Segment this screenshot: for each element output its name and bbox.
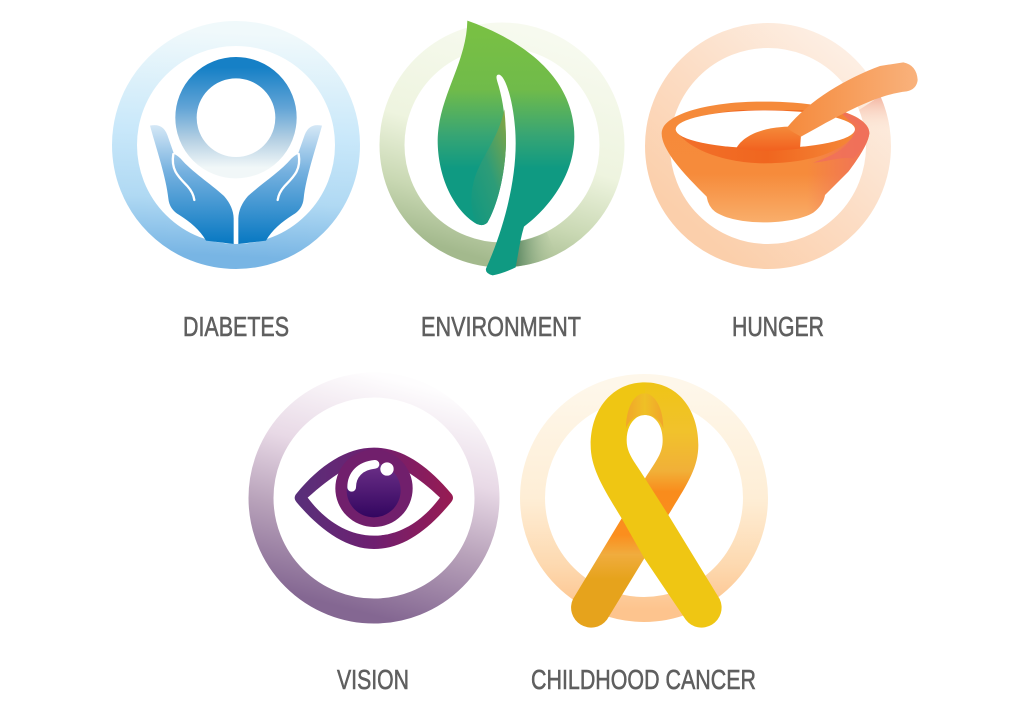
icon: leaf [438,21,574,275]
ring: environment [392,35,612,255]
label: environment: ENVIRONMENT [421,311,581,342]
icon: bowl and spoon [662,62,918,222]
ring: vision [261,385,487,611]
label: childhood cancer: CHILDHOOD CANCER [531,664,756,695]
icon: ribbon [571,382,722,628]
label: vision: VISION [337,664,409,695]
panel: diabetes icon [124,34,348,256]
label: hunger: HUNGER [732,311,824,342]
icon: cupped hands holding circle [150,68,322,244]
panel: hunger icon [658,36,918,256]
ring: childhood cancer [532,386,756,610]
panel: vision icon [261,385,487,611]
panel: environment icon [392,21,612,275]
ring: diabetes [124,34,348,256]
label: diabetes: DIABETES [183,311,289,342]
ring: hunger [658,36,878,256]
icon: eye [295,448,453,549]
panel: childhood cancer icon [532,382,756,628]
